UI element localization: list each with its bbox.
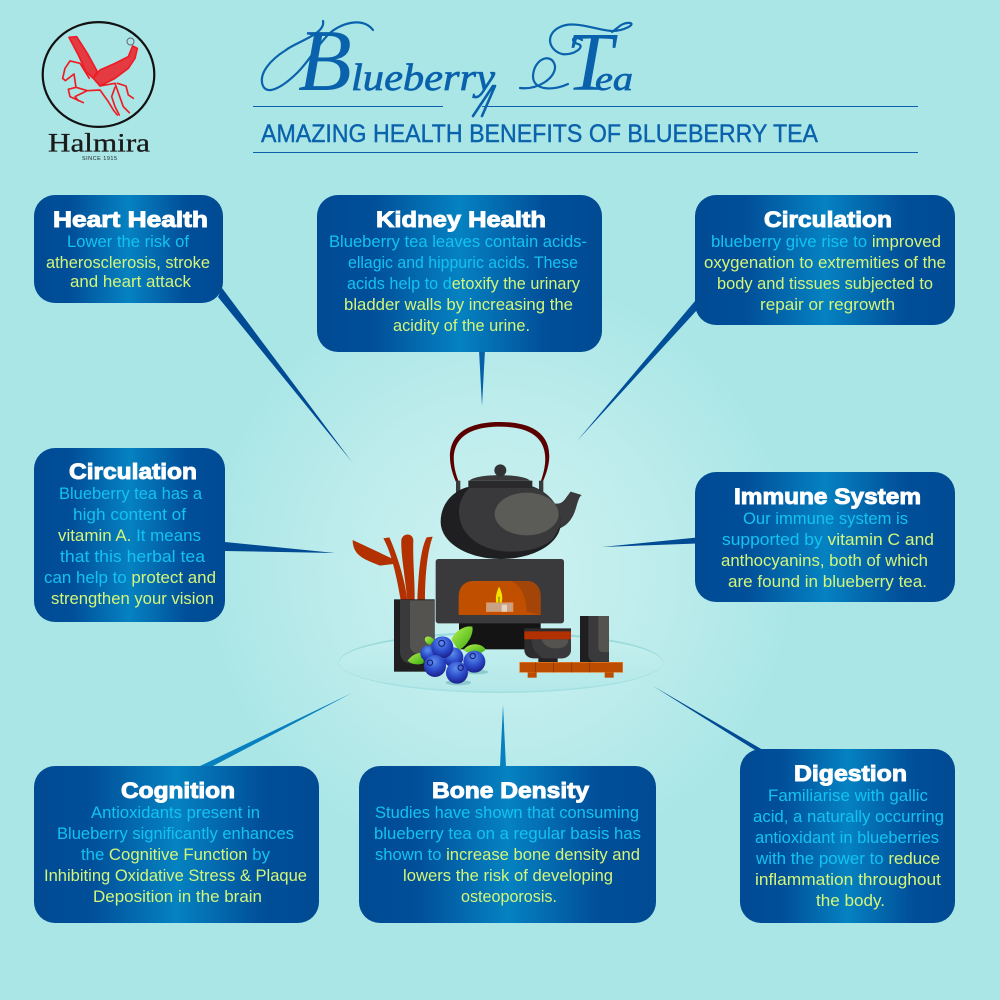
since label: SINCE 1915 bbox=[82, 156, 117, 162]
panel: Circulation (left) bbox=[34, 448, 225, 622]
heading: Cognition bbox=[121, 778, 235, 803]
body text: acid, a naturally occurring bbox=[753, 807, 944, 826]
body text: ellagic and hippuric acids. These bbox=[348, 253, 578, 272]
panel: Immune System bbox=[695, 472, 955, 602]
body text: bladder walls by increasing the bbox=[344, 295, 573, 314]
heading: Kidney Health bbox=[376, 207, 546, 232]
title rules bbox=[253, 106, 918, 153]
body text: acids help to detoxify the urinary bbox=[347, 274, 580, 293]
body text: the body. bbox=[816, 891, 885, 910]
panel: Digestion bbox=[740, 749, 955, 923]
body text: with the power to reduce bbox=[755, 849, 940, 868]
blueberries and leaves bbox=[408, 626, 488, 685]
body text: vitamin A. It means bbox=[58, 526, 201, 545]
heading: Bone Density bbox=[432, 778, 590, 803]
body text: strengthen your vision bbox=[51, 589, 214, 608]
body text: body and tissues subjected to bbox=[717, 274, 933, 293]
heading: Heart Health bbox=[53, 207, 208, 232]
logo: Halmira bbox=[43, 22, 154, 162]
body text bbox=[374, 803, 641, 906]
body text bbox=[704, 232, 946, 314]
body text bbox=[329, 232, 587, 335]
body text: Deposition in the brain bbox=[93, 887, 262, 906]
brand name: Halmira bbox=[48, 128, 151, 158]
stove bbox=[436, 559, 564, 649]
body text: Blueberry significantly enhances bbox=[57, 824, 294, 843]
panel: Cognition bbox=[34, 766, 319, 923]
icon: registered mark bbox=[127, 38, 134, 45]
body text: the Cognitive Function by bbox=[81, 845, 270, 864]
heading: Immune System bbox=[734, 484, 921, 509]
body text: Our immune system is bbox=[743, 509, 908, 528]
body text: shown to increase bone density and bbox=[375, 845, 640, 864]
body text: Blueberry tea leaves contain acids- bbox=[329, 232, 587, 251]
body text: blueberry tea on a regular basis has bbox=[374, 824, 641, 843]
body text: anthocyanins, both of which bbox=[721, 551, 928, 570]
heading: Circulation bbox=[69, 459, 197, 484]
body text: repair or regrowth bbox=[760, 295, 895, 314]
body text: atherosclerosis, stroke bbox=[46, 253, 210, 272]
body text: Familiarise with gallic bbox=[768, 786, 928, 805]
body text: oxygenation to extremities of the bbox=[704, 253, 946, 272]
decorative flourish on capitals bbox=[262, 21, 632, 116]
body text: and heart attack bbox=[70, 272, 191, 291]
cup and tray bbox=[520, 616, 623, 678]
body text: antioxidant in blueberries bbox=[755, 828, 939, 847]
body text: Studies have shown that consuming bbox=[375, 803, 639, 822]
body text: osteoporosis. bbox=[461, 887, 557, 906]
title: Blueberry Tea: lueberry bbox=[351, 57, 495, 99]
title: Blueberry Tea bbox=[262, 13, 633, 116]
title: Blueberry Tea: T bbox=[566, 16, 618, 109]
panel: Bone Density bbox=[359, 766, 656, 923]
body text: are found in blueberry tea. bbox=[728, 572, 927, 591]
body text bbox=[44, 803, 307, 906]
title: Blueberry Tea: B bbox=[298, 13, 352, 110]
body text bbox=[44, 484, 216, 608]
utensil holder bbox=[353, 534, 435, 672]
heading: Circulation bbox=[764, 207, 892, 232]
body text: blueberry give rise to improved bbox=[711, 232, 941, 251]
body text: inflammation throughout bbox=[755, 870, 941, 889]
body text: Lower the risk of bbox=[67, 232, 189, 251]
illustration: tea set bbox=[339, 422, 663, 693]
kettle bbox=[441, 422, 582, 559]
platform bbox=[339, 632, 663, 693]
body text: acidity of the urine. bbox=[393, 316, 530, 335]
heading: Digestion bbox=[794, 761, 907, 786]
body text: high content of bbox=[73, 505, 186, 524]
body text: Blueberry tea has a bbox=[59, 484, 203, 503]
body text: lowers the risk of developing bbox=[403, 866, 613, 885]
panel: Kidney Health bbox=[317, 195, 602, 352]
body text bbox=[46, 232, 210, 291]
body text bbox=[753, 786, 944, 910]
body text: Inhibiting Oxidative Stress & Plaque bbox=[44, 866, 307, 885]
panel: Circulation (top right) bbox=[695, 195, 955, 325]
body text: that this herbal tea bbox=[60, 547, 206, 566]
body text: Antioxidants present in bbox=[91, 803, 260, 822]
icon: red pegasus bbox=[63, 37, 137, 115]
panel: Heart Health bbox=[34, 195, 223, 303]
body text: can help to protect and bbox=[44, 568, 216, 587]
pointer spikes bbox=[198, 288, 763, 767]
body text bbox=[721, 509, 934, 591]
subtitle: AMAZING HEALTH BENEFITS OF BLUEBERRY TEA bbox=[261, 120, 818, 148]
title: Blueberry Tea: ea bbox=[595, 61, 633, 98]
body text: supported by vitamin C and bbox=[722, 530, 934, 549]
